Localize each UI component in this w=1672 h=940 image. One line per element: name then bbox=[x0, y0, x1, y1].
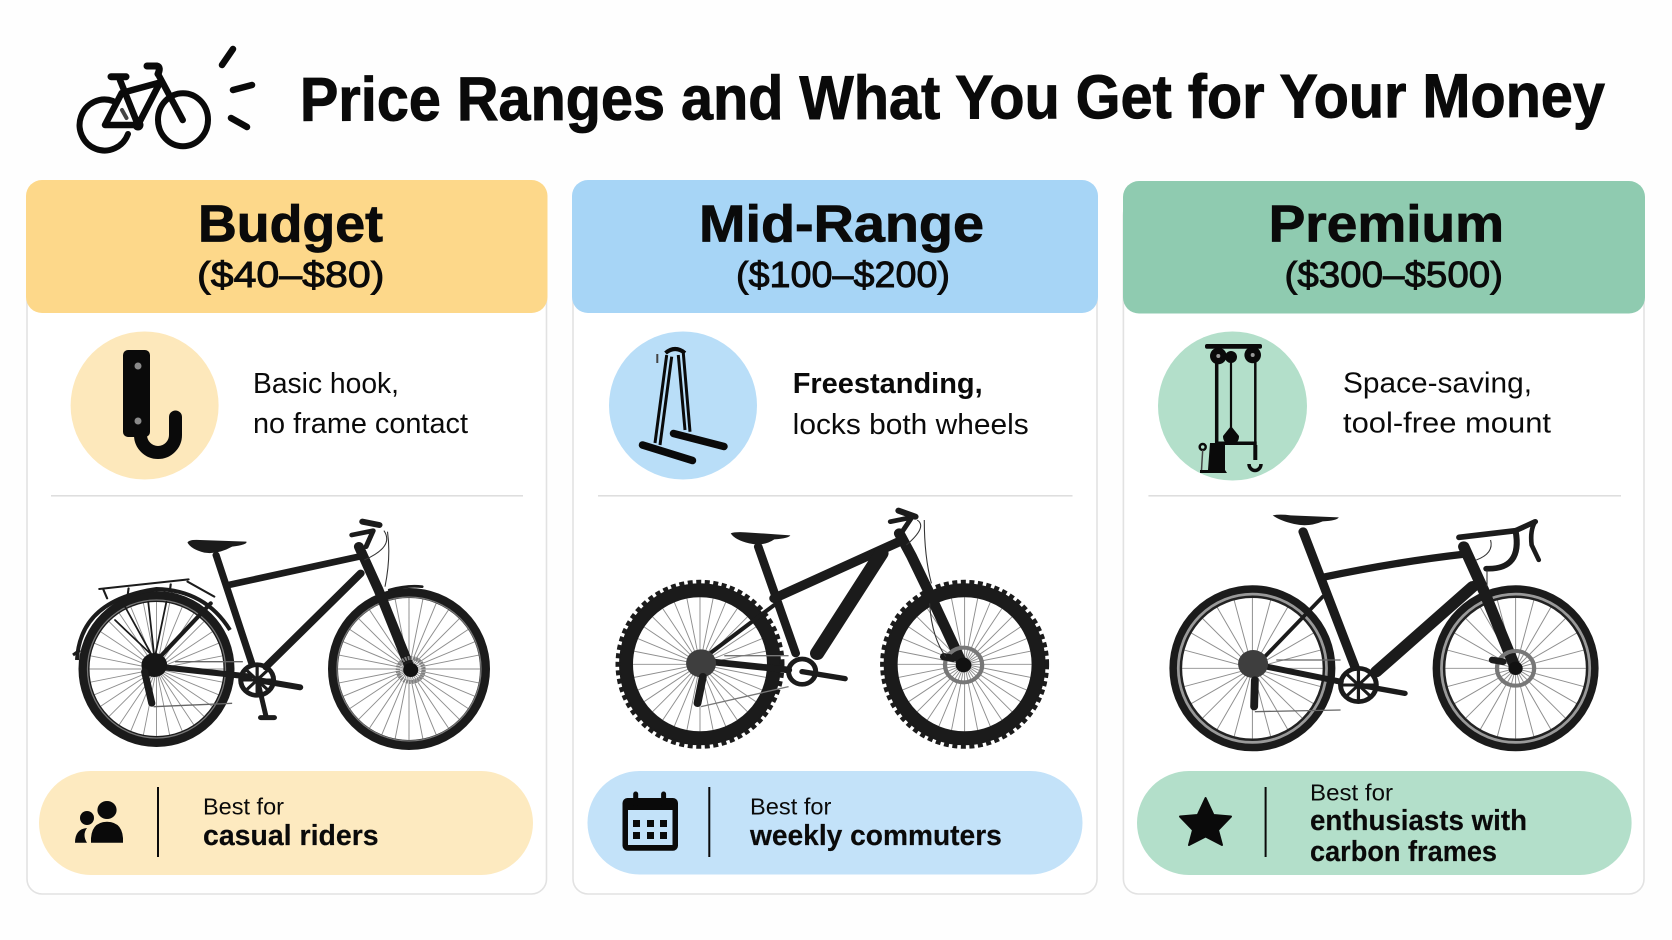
panel: mid-range bbox=[572, 180, 1098, 894]
text: casual riders bbox=[203, 793, 379, 852]
header band: mid-range: ($100–$200) bbox=[736, 254, 950, 295]
text: stand description: Freestanding, bbox=[793, 368, 983, 400]
text: weekly commuters: weekly commuters bbox=[749, 820, 1002, 852]
header band: mid-range bbox=[572, 180, 1098, 313]
text: mount description: tool-free mount bbox=[1343, 408, 1551, 440]
card outline: mid-range bbox=[573, 200, 1097, 894]
card outline: premium bbox=[1123, 200, 1644, 894]
illustration: mountain bike bbox=[618, 511, 1047, 746]
callout: best for enthusiasts bbox=[1137, 771, 1632, 875]
icon: wall hook bbox=[71, 332, 219, 480]
text: enthusiasts: Best for bbox=[1310, 780, 1393, 806]
text: stand description: locks both wheels bbox=[793, 409, 1029, 441]
text: casual riders: casual riders bbox=[203, 820, 379, 852]
title: Price Ranges and What You Get for Your Money bbox=[300, 62, 1606, 135]
panel: premium bbox=[1123, 181, 1645, 894]
icon: bicycle with motion rays bbox=[80, 49, 252, 151]
header band: premium: ($300–$500) bbox=[1284, 254, 1503, 295]
header band: budget: ($40–$80) bbox=[197, 254, 384, 295]
header band: premium bbox=[1123, 181, 1645, 314]
text: mount description: Space-saving, bbox=[1343, 368, 1532, 400]
text: mount description bbox=[1343, 368, 1551, 440]
header band: mid-range: Mid-Range bbox=[699, 196, 984, 254]
text: hook description bbox=[253, 368, 468, 440]
text: enthusiasts: enthusiasts with bbox=[1310, 805, 1527, 837]
callout: best for casual riders bbox=[39, 771, 533, 875]
text: hook description: no frame contact bbox=[253, 408, 468, 440]
text: enthusiasts bbox=[1310, 780, 1527, 868]
header band: budget bbox=[26, 180, 548, 313]
text: weekly commuters: Best for bbox=[750, 793, 832, 819]
icon: calendar bbox=[622, 794, 678, 851]
icon: star bbox=[1180, 798, 1231, 845]
panel: budget bbox=[26, 180, 548, 894]
text: casual riders: Best for bbox=[203, 793, 284, 819]
callout: best for weekly commuters bbox=[588, 771, 1082, 874]
illustration: hybrid bike bbox=[73, 522, 485, 745]
icon: people bbox=[75, 801, 123, 843]
text: enthusiasts: carbon frames bbox=[1310, 836, 1497, 868]
header band: budget: Budget bbox=[198, 196, 383, 254]
icon: freestanding stand bbox=[609, 332, 757, 480]
text: stand description bbox=[793, 368, 1029, 441]
card outline: budget bbox=[27, 200, 546, 894]
icon: pulley hoist bbox=[1158, 332, 1307, 480]
illustration: road bike bbox=[1173, 515, 1595, 747]
text: hook description: Basic hook, bbox=[253, 368, 399, 400]
header band: premium: Premium bbox=[1269, 196, 1504, 254]
text: weekly commuters bbox=[749, 793, 1002, 852]
